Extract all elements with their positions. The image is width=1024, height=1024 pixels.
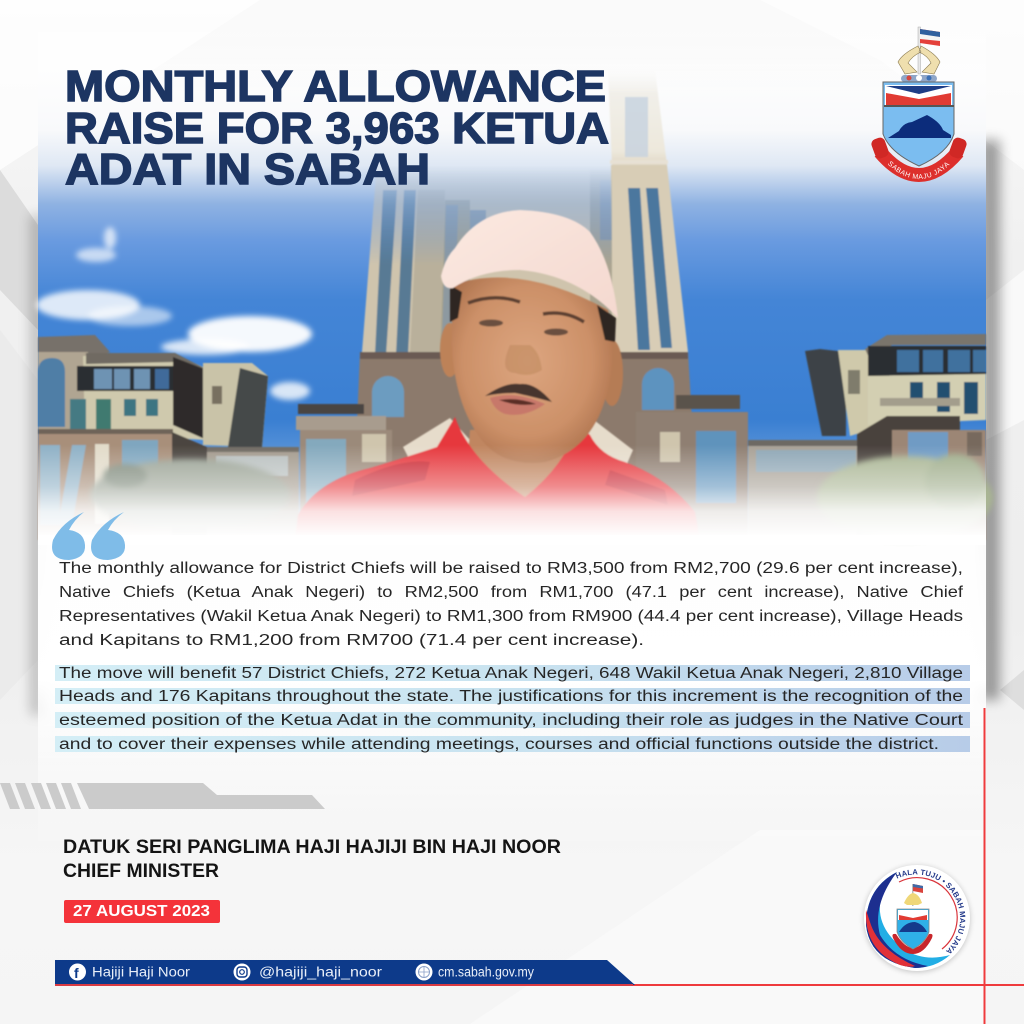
- brows: [468, 298, 520, 303]
- instagram: @hajiji_haji_noor: [259, 964, 383, 980]
- crest motto: SABAH MAJU JAYA: [888, 161, 950, 180]
- title: RAISE FOR 3,963 KETUA: [65, 104, 609, 153]
- speaker name and role: [63, 837, 561, 882]
- faded photo strip: [38, 535, 986, 545]
- beneficiaries text: and to cover their expenses while attending meetings, courses and official functions outside the district.: [59, 736, 939, 753]
- decorative stripes graphic: [0, 783, 325, 809]
- instagram: [234, 964, 383, 980]
- trees: [90, 454, 993, 540]
- website: [416, 964, 534, 980]
- crest wreath: [901, 75, 937, 82]
- text block: allowance details: The monthly allowance for District Chiefs will be raised to RM3,500 from RM2,700 (29.6 per cent increase),: [59, 560, 963, 577]
- title: ADAT IN SABAH: [65, 145, 430, 194]
- badge inner arc: [899, 878, 957, 949]
- hair: [450, 285, 462, 322]
- facebook: f: [74, 965, 79, 981]
- text block: allowance details: and Kapitans to RM1,200 from RM700 (71.4 per cent increase).: [59, 632, 644, 649]
- red shirt: [295, 417, 700, 540]
- date badge: 27 AUGUST 2023: [73, 903, 210, 920]
- icon: Hala Tuju badge: [862, 864, 972, 974]
- text block: allowance details: [59, 560, 964, 649]
- shirt collar underlay: [403, 417, 633, 480]
- text block: allowance details: Representatives (Wakil Ketua Anak Negeri) to RM1,300 from RM900 (44.4 per cent increase), Village Heads: [59, 608, 963, 625]
- title: MONTHLY ALLOWANCE: [65, 62, 606, 111]
- mustache: [485, 384, 552, 402]
- face: [452, 278, 612, 463]
- crest arms: [898, 46, 940, 74]
- beneficiaries text: [59, 665, 964, 753]
- highlight bars: [55, 665, 970, 752]
- badge motto: HALA TUJU • SABAH MAJU JAYA: [896, 869, 966, 954]
- highlighted text block: beneficiaries: [55, 665, 970, 753]
- beneficiaries text: Heads and 176 Kapitans throughout the state. The justifications for this increment is the recognition of the: [59, 688, 963, 705]
- facebook: [69, 964, 191, 981]
- building: central tower: [296, 70, 748, 540]
- tower base: [355, 352, 695, 470]
- crest shield: [883, 82, 954, 166]
- title: [65, 62, 609, 194]
- date badge: [64, 900, 220, 923]
- clouds: [36, 227, 312, 400]
- badge crescent: [866, 872, 950, 968]
- facebook: Hajiji Haji Noor: [92, 964, 191, 980]
- text block: allowance details: Native Chiefs (Ketua Anak Negeri) to RM2,500 from RM1,700 (47.1 per cent increase), Native Chief: [59, 584, 964, 601]
- ears: [440, 323, 460, 377]
- building: right wing: [748, 334, 986, 540]
- tower right column body: [611, 165, 688, 352]
- social ribbon: [55, 960, 635, 986]
- badge mini crest: [892, 884, 933, 954]
- neck: [465, 425, 590, 510]
- building: left wing: [38, 335, 299, 540]
- crest ribbon: [870, 136, 968, 175]
- mouth: [490, 395, 545, 415]
- tower ledge: [610, 160, 668, 164]
- beneficiaries text: esteemed position of the Ketua Adat in the community, including their role as judges in the Native Court: [59, 712, 964, 729]
- speaker name and role: CHIEF MINISTER: [63, 861, 219, 882]
- panel: hero photo: [36, 60, 993, 545]
- sky: [38, 60, 986, 540]
- tower upper right column: [608, 70, 667, 165]
- hat: [441, 210, 618, 318]
- panel shadow: [30, 140, 1000, 715]
- icon: Sabah state crest: [871, 26, 967, 182]
- bottom white fade: [38, 445, 986, 537]
- eyes: [479, 320, 503, 326]
- panel: white content card: [38, 0, 986, 850]
- beneficiaries text: The move will benefit 57 District Chiefs, 272 Ketua Anak Negeri, 648 Wakil Ketua Anak Negeri, 2,810 Village: [59, 665, 963, 682]
- red corner lines: [625, 708, 1024, 1024]
- crest flag: [918, 27, 940, 74]
- website: cm.sabah.gov.my: [438, 964, 534, 980]
- speaker name and role: DATUK SERI PANGLIMA HAJI HAJIJI BIN HAJI NOOR: [63, 837, 561, 858]
- person photo: [295, 210, 700, 540]
- icon: quotation mark: [52, 512, 125, 560]
- nose: [505, 345, 542, 375]
- tower window strips: [628, 188, 650, 350]
- tower upper window: [625, 97, 648, 157]
